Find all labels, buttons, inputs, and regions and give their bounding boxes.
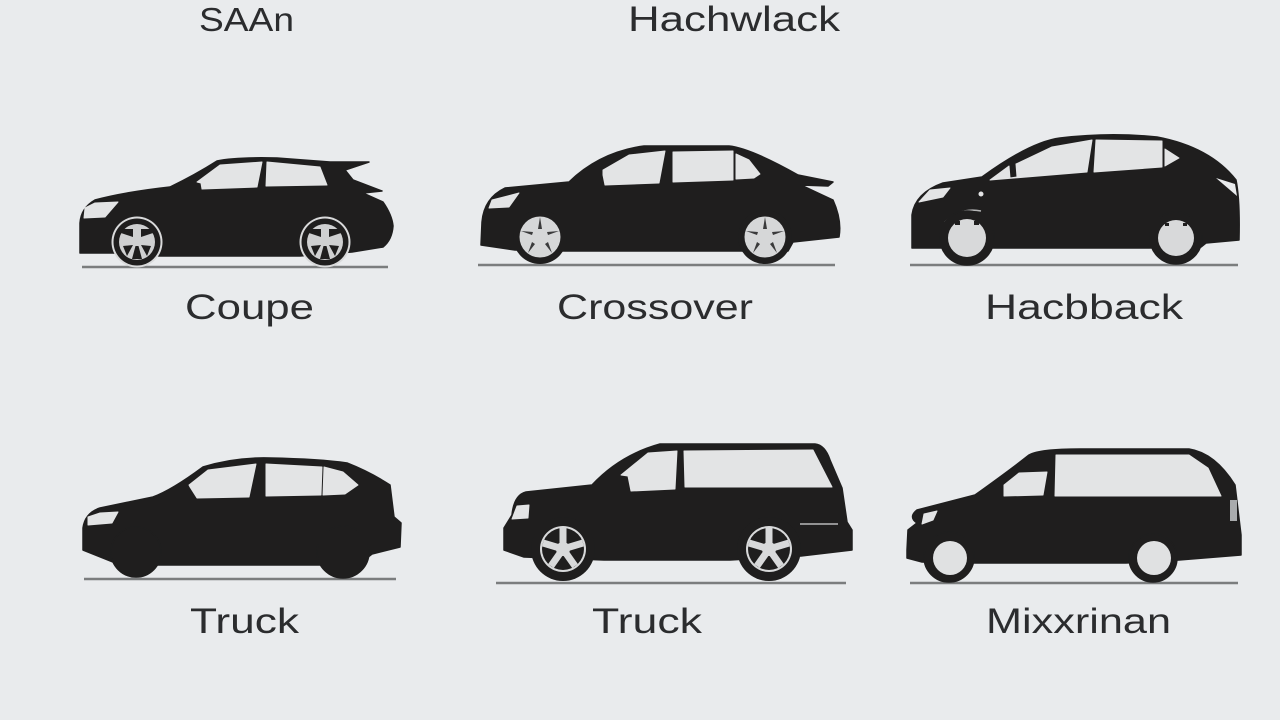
panel: truck left — [83, 458, 401, 641]
label: Crossover: Crossover — [557, 288, 753, 327]
panel: hatchback — [910, 135, 1239, 327]
panel: crossover — [478, 146, 840, 327]
label: Truck: Truck — [592, 602, 703, 641]
label: Truck: Truck — [190, 602, 300, 641]
front wheel — [940, 211, 994, 265]
label: Mixxrinan: Mixxrinan — [986, 602, 1171, 641]
panel: minivan — [907, 449, 1241, 641]
heading: Saan: SAAn — [199, 1, 294, 38]
label: Coupe: Coupe — [185, 288, 314, 327]
label: Hacbback: Hacbback — [985, 288, 1184, 327]
heading: Hachwlack: Hachwlack — [628, 0, 841, 39]
panel: truck centre — [496, 444, 852, 641]
rear wheel — [1150, 212, 1202, 264]
panel: coupe — [80, 158, 393, 327]
